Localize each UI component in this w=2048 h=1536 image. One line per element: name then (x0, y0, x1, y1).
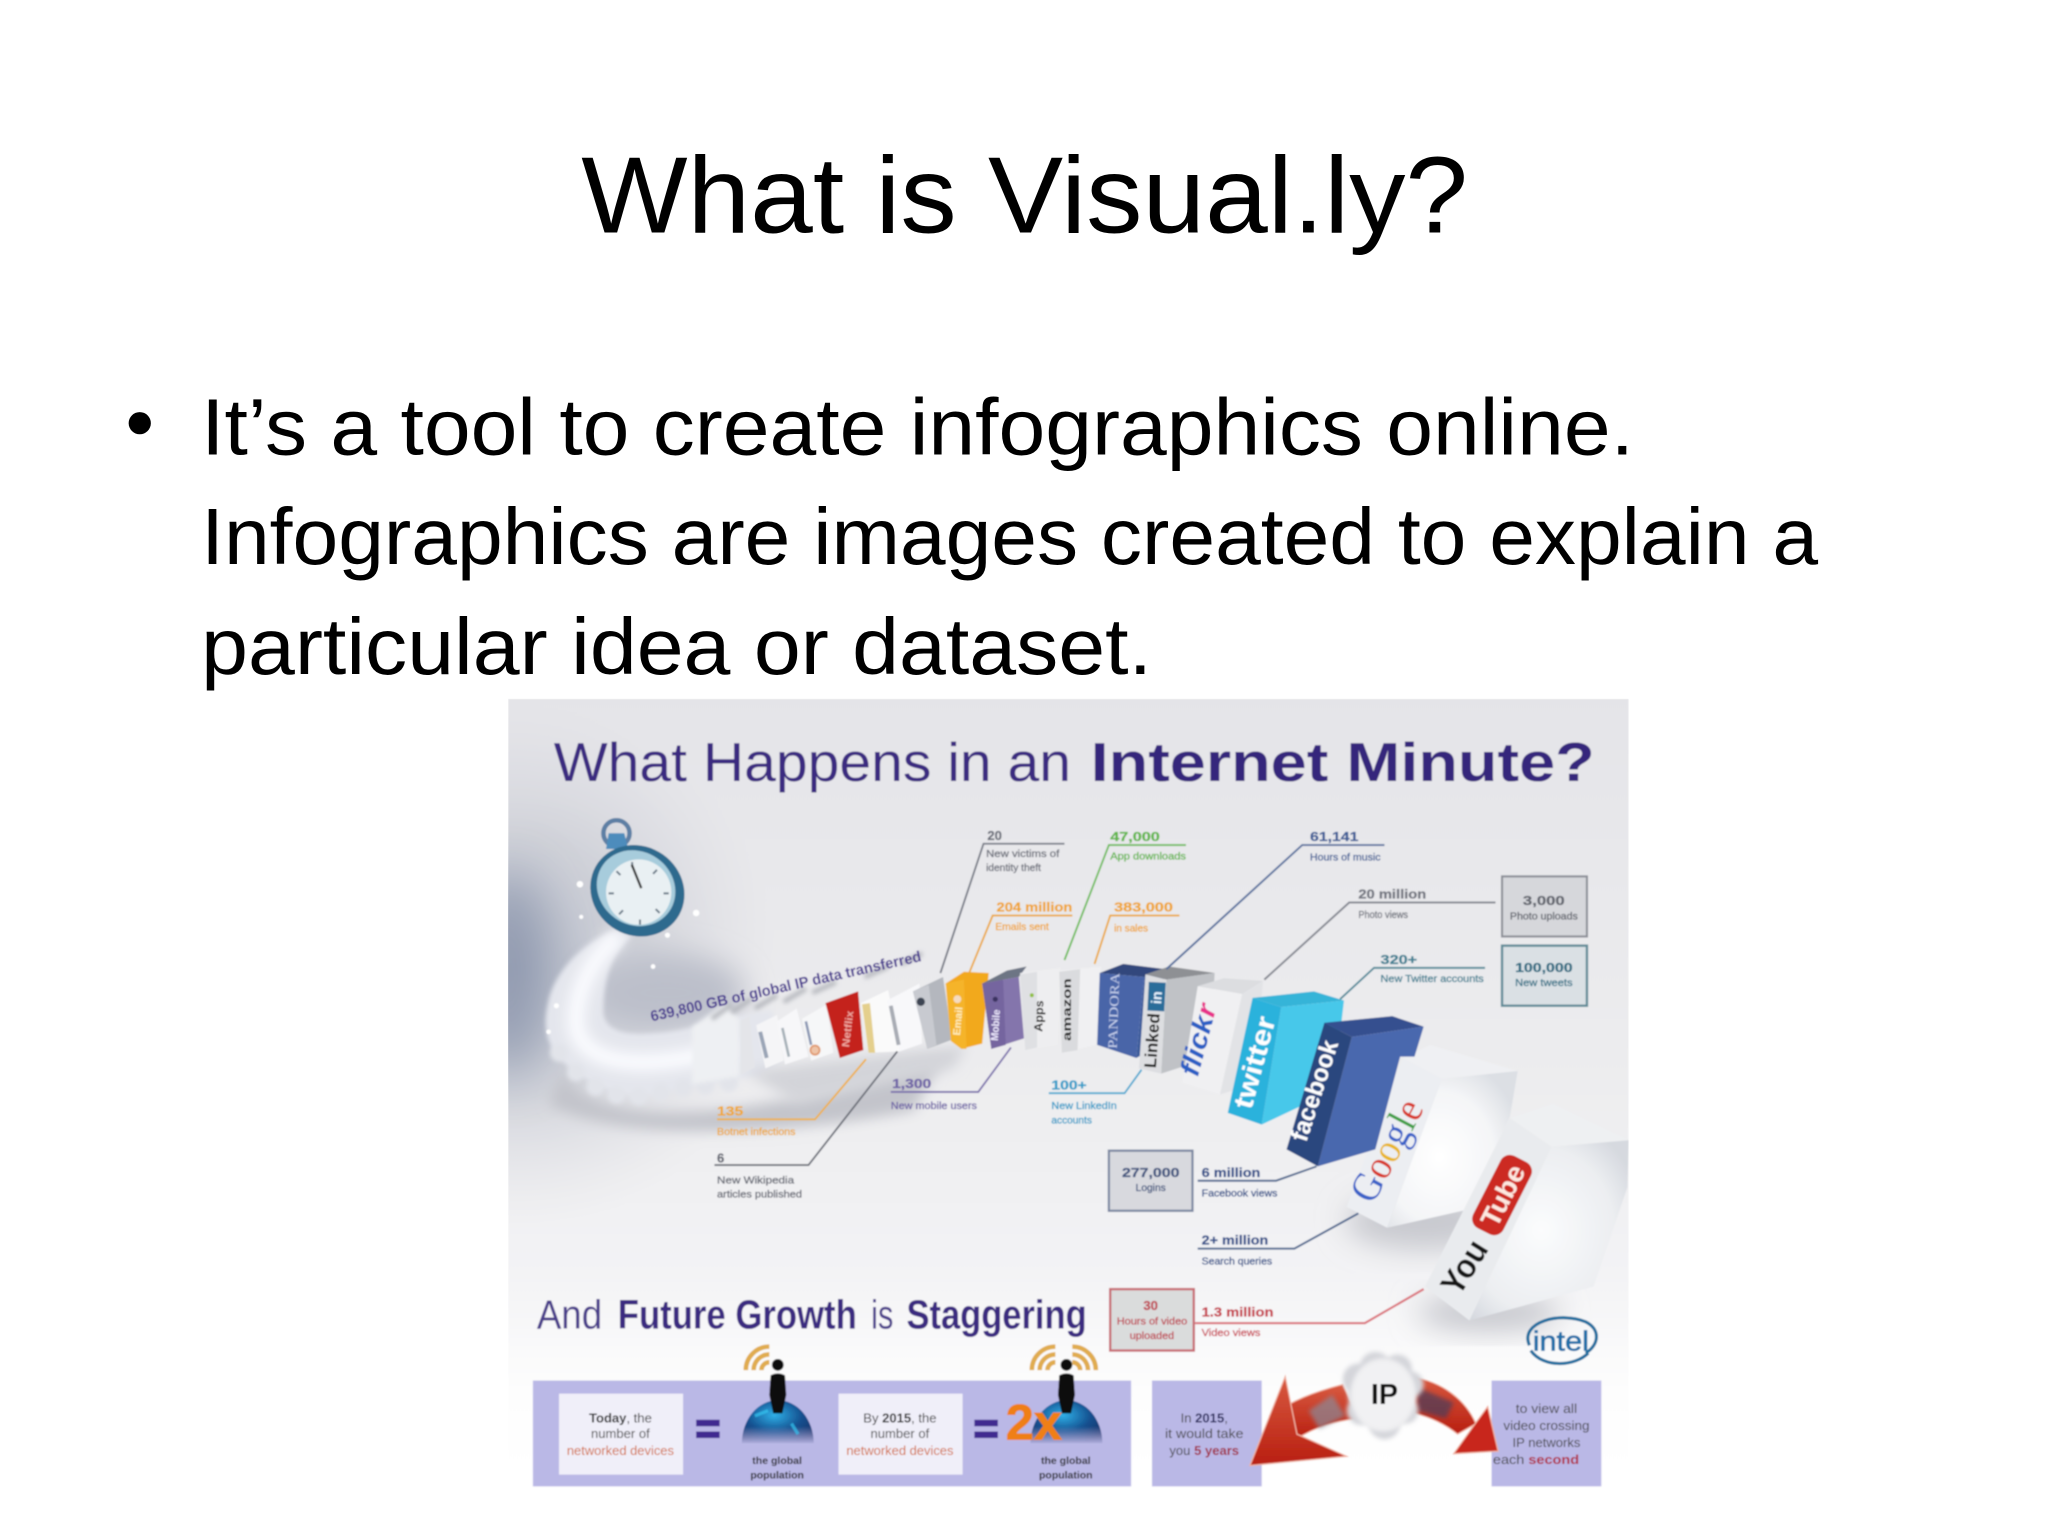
callout: twitter accounts: New Twitter accounts (1381, 974, 1484, 985)
panel: in 2015: it would take (1165, 1426, 1243, 1441)
block: facebook (1286, 1016, 1424, 1166)
panel: in 2015: you 5 years (1169, 1443, 1239, 1458)
block: amazon (1059, 970, 1080, 1052)
callout: wikipedia articles: New Wikipedia (717, 1175, 795, 1186)
box: video uploaded: uploaded (1130, 1331, 1174, 1342)
callout: identity theft: 20 (987, 828, 1002, 843)
block: apps: Apps (1032, 1000, 1046, 1032)
callout: emails sent (969, 900, 1072, 973)
block: purple: Mobile (990, 1009, 1003, 1041)
panel: each second: each second (1493, 1452, 1579, 1467)
box: video uploaded: 30 (1143, 1298, 1158, 1313)
icon: IP cloud (1343, 1352, 1424, 1439)
bullet text block: particular idea or dataset. (201, 602, 1152, 691)
icon: globe with person and 2x (1006, 1347, 1106, 1482)
label: data transferred: 639,800 GB of global IP data transferred (649, 948, 923, 1025)
data blocks: small services (756, 977, 952, 1068)
callout: identity theft (940, 828, 1064, 973)
callout: wikipedia articles: articles published (717, 1190, 802, 1201)
block: red: Netflix (841, 1010, 856, 1048)
callout: app downloads: App downloads (1110, 851, 1186, 862)
arrow: right red (1411, 1377, 1498, 1454)
callout: facebook views: Facebook views (1202, 1188, 1277, 1199)
icon: globe with person: population (750, 1471, 804, 1482)
callout: video views (1195, 1289, 1424, 1339)
text box: by 2015 (839, 1394, 963, 1475)
callout: facebook views (1198, 1165, 1317, 1199)
arrow: left red (1250, 1377, 1358, 1465)
callout: video views: Video views (1202, 1328, 1261, 1339)
callout: hours of music: 61,141 (1310, 829, 1358, 844)
icon: intel logo: intel (1533, 1326, 1589, 1357)
callout: new linkedin accounts: New LinkedIn (1051, 1101, 1117, 1112)
panel: each second: video crossing (1503, 1418, 1590, 1433)
callout: new linkedin accounts: 100+ (1051, 1077, 1087, 1092)
callout: emails sent: Emails sent (995, 922, 1049, 933)
box: video uploaded: Hours of video (1117, 1316, 1188, 1327)
box: video uploaded (1110, 1289, 1194, 1351)
icon: equals (974, 1420, 998, 1438)
panel: networked devices comparison (533, 1347, 1131, 1486)
callout: wikipedia articles (714, 1051, 897, 1201)
callout: search queries (1198, 1213, 1358, 1267)
block: youtube: Tube (1474, 1159, 1532, 1232)
box: logins: 277,000 (1122, 1165, 1179, 1180)
callout: photo views: Photo views (1358, 910, 1408, 921)
callout: botnet infections: 135 (717, 1103, 743, 1118)
panel: in 2015: In 2015, (1181, 1410, 1228, 1425)
box: photo uploads: Photo uploads (1510, 912, 1578, 923)
text box: today (559, 1394, 683, 1475)
box: new tweets: 100,000 (1515, 960, 1573, 975)
block: flickr: flickr (1174, 999, 1223, 1079)
heading: future growth: is (871, 1291, 893, 1337)
infographic heading: What Happens in an (554, 731, 1071, 793)
block: youtube: You (1433, 1233, 1496, 1302)
block: email yellow (946, 972, 989, 1049)
block: linkedin: in (1149, 991, 1166, 1005)
block: twitter: twitter (1227, 1013, 1281, 1112)
callout: identity theft: New victims of (986, 849, 1060, 860)
heading: future growth (537, 1291, 1087, 1337)
callout: photo views: 20 million (1358, 887, 1426, 902)
panel: in 2015 (1152, 1381, 1262, 1486)
callout: hours of music: Hours of music (1310, 853, 1381, 864)
callout: sales (1095, 900, 1179, 964)
callout: botnet infections (717, 1059, 866, 1138)
block: google: Google (1341, 1091, 1433, 1210)
heading: future growth: And (537, 1291, 602, 1337)
callout: new mobile users: New mobile users (891, 1101, 977, 1112)
block: pandora: PANDORA (1105, 972, 1122, 1049)
bullet text block (129, 383, 1819, 691)
icon: globe with person and 2x: population (1039, 1471, 1093, 1482)
text box: today: networked devices (567, 1443, 674, 1458)
text box: by 2015: networked devices (846, 1443, 954, 1458)
callout: app downloads: 47,000 (1110, 829, 1160, 844)
callout: new mobile users: 1,300 (892, 1076, 931, 1091)
callout: app downloads (1064, 829, 1186, 960)
callout: new linkedin accounts: accounts (1051, 1115, 1092, 1126)
icon: equals (696, 1420, 720, 1438)
block: email yellow: Email (952, 1006, 966, 1036)
icon: globe with person and 2x: 2x (1006, 1394, 1062, 1450)
text box: by 2015: By 2015, the (863, 1410, 937, 1425)
callout: identity theft: identity theft (986, 863, 1041, 874)
text box: today: Today, the (589, 1410, 652, 1425)
block: linkedin: Linked (1141, 1013, 1164, 1069)
infographic heading: Internet Minute? (1091, 731, 1595, 793)
callout: facebook views: 6 million (1202, 1165, 1260, 1180)
panel: each second (1492, 1381, 1601, 1486)
block: twitter (1227, 991, 1344, 1125)
box: new tweets (1502, 946, 1587, 1006)
callout: sales: 383,000 (1114, 900, 1173, 915)
callout: hours of music (1166, 829, 1384, 969)
callout: twitter accounts: 320+ (1381, 952, 1418, 967)
icon: intel logo (1528, 1318, 1596, 1364)
callout: photo views (1264, 887, 1496, 980)
icon: globe with person: the global (752, 1456, 802, 1467)
block: amazon: amazon (1061, 978, 1074, 1041)
callout: new mobile users (891, 1048, 1011, 1112)
callout: new linkedin accounts (1049, 1070, 1142, 1126)
icon: globe with person (739, 1347, 818, 1482)
box: logins (1109, 1151, 1192, 1211)
bullet text block: It’s a tool to create infographics online. (201, 383, 1634, 472)
icon: globe with person and 2x: the global (1041, 1456, 1091, 1467)
callout: wikipedia articles: 6 (717, 1150, 724, 1165)
title: What is Visual.ly? (581, 134, 1468, 255)
heading: future growth: Future Growth (618, 1291, 857, 1337)
box: photo uploads (1502, 876, 1587, 936)
callout: search queries: 2+ million (1202, 1233, 1268, 1248)
block: pandora (1097, 964, 1165, 1058)
block: red (825, 991, 863, 1058)
block: facebook: facebook (1286, 1037, 1344, 1145)
panel: each second: to view all (1516, 1401, 1577, 1416)
text box: today: number of (591, 1426, 650, 1441)
block: linkedin (1139, 967, 1215, 1074)
block: flickr (1174, 978, 1263, 1095)
text box: by 2015: number of (871, 1426, 930, 1441)
callout: botnet infections: Botnet infections (717, 1127, 796, 1138)
box: new tweets: New tweets (1515, 978, 1573, 989)
block: purple (982, 967, 1027, 1049)
heading: future growth: Staggering (906, 1291, 1087, 1337)
callout: sales: in sales (1114, 923, 1148, 934)
block: youtube (1417, 1104, 1629, 1331)
callout: video views: 1.3 million (1202, 1305, 1273, 1320)
data trail (546, 881, 967, 1131)
callout: twitter accounts (1340, 952, 1485, 999)
icon: IP cloud: IP (1371, 1379, 1398, 1411)
panel: each second: IP networks (1512, 1435, 1581, 1450)
callout: emails sent: 204 million (997, 900, 1072, 915)
block: google (1341, 1045, 1518, 1250)
icon: stopwatch (590, 817, 686, 938)
callout: search queries: Search queries (1202, 1256, 1272, 1267)
infographic: What Happens in an Internet Minute (470, 699, 1629, 1502)
block: apps (1019, 972, 1046, 1050)
box: photo uploads: 3,000 (1523, 893, 1565, 908)
infographic heading (553, 740, 1592, 794)
bullet text block: Infographics are images created to explain a (201, 492, 1819, 581)
box: logins: Logins (1136, 1183, 1166, 1194)
